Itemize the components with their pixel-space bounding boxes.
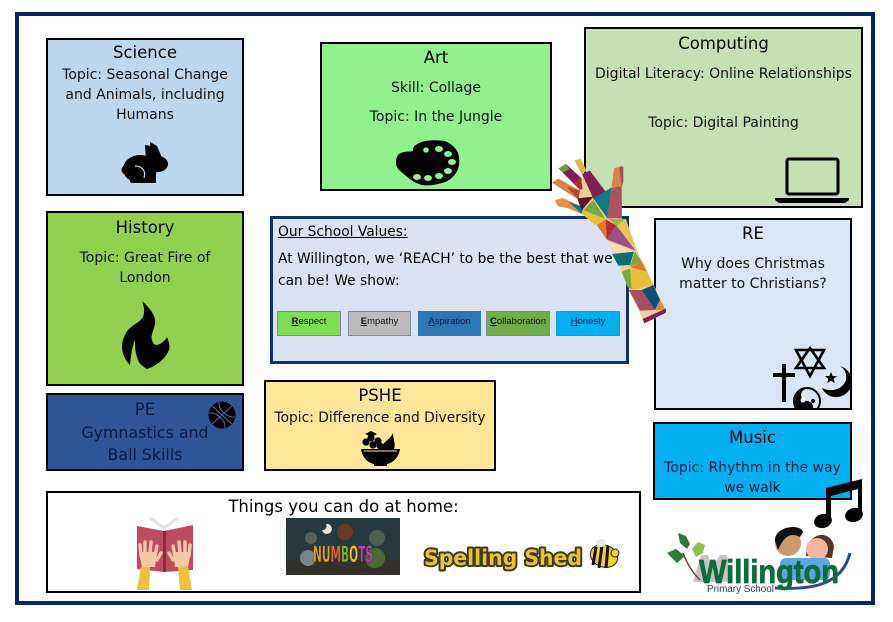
text: reach statement: At Willington, we ‘REACH’ to be the best that we	[278, 251, 613, 267]
text: PE topic: Gymnastics and	[81, 423, 209, 442]
icon: rabbit	[122, 142, 168, 183]
text: science topic: Topic: Seasonal Change	[62, 67, 228, 83]
logo: willington primary school	[667, 527, 850, 595]
heading: art: Art	[424, 48, 448, 67]
icon: religious symbols	[773, 348, 852, 414]
panel: PE	[46, 393, 244, 471]
icon: geometric raised hand	[552, 159, 666, 323]
text: science topic: and Animals, including	[65, 87, 225, 103]
panel: PSHE	[264, 380, 496, 471]
text: digital literacy: Digital Literacy: Online Relationships	[595, 66, 852, 82]
value: respect: Respect	[292, 316, 326, 327]
heading: PSHE: PSHE	[358, 386, 402, 405]
value: aspiration	[418, 311, 481, 336]
text: PE topic: Ball Skills	[108, 445, 182, 464]
heading: RE: RE	[742, 224, 764, 243]
image: spelling shed logo: Spelling Shed	[424, 546, 582, 570]
heading: PE: PE	[135, 400, 155, 419]
text: science topic: Humans	[116, 107, 174, 123]
icon: flame	[122, 301, 169, 369]
icon: book with hands	[137, 518, 193, 590]
text: music topic: we walk	[724, 480, 781, 496]
value: collaboration	[486, 311, 550, 336]
logo: willington primary school: Willington	[699, 553, 839, 590]
image: numbots	[286, 518, 400, 575]
panel: music	[653, 422, 852, 500]
icon: paint palette	[396, 140, 459, 185]
text: reach statement	[278, 251, 613, 289]
text: PSHE topic: Topic: Difference and Diversity	[275, 410, 485, 426]
value: aspiration: Aspiration	[428, 316, 471, 327]
panel: history	[46, 211, 244, 386]
image: spelling shed logo	[424, 539, 621, 571]
text: science topic	[62, 67, 228, 123]
value: respect	[277, 311, 341, 336]
icon: musical notes	[812, 479, 865, 530]
text: history topic: London	[119, 270, 171, 286]
text: reach statement: can be! We show:	[278, 273, 400, 289]
panel: RE	[654, 218, 852, 410]
text: art skill: Skill: Collage	[391, 80, 481, 96]
panel: computing	[584, 27, 863, 208]
text: computing topic: Topic: Digital Painting	[648, 115, 799, 131]
value: collaboration: Collaboration	[490, 316, 546, 327]
heading: things you can do at home: Things you can do at home:	[228, 497, 459, 516]
heading: our school values: Our School Values:	[278, 224, 408, 240]
icon: basketball	[208, 402, 236, 428]
text: PE topic	[81, 423, 209, 464]
text: history topic	[80, 250, 211, 286]
text: RE question: Why does Christmas	[681, 256, 825, 272]
heading: science: Science	[113, 43, 177, 62]
value: empathy	[348, 311, 411, 336]
logo: willington primary school: Primary School	[707, 584, 774, 595]
text: music topic: Topic: Rhythm in the way	[664, 460, 841, 476]
text: RE question: matter to Christians?	[679, 276, 827, 292]
panel: things to do at home	[46, 491, 641, 593]
heading: history: History	[116, 218, 174, 237]
icon: laptop	[775, 159, 849, 203]
value: empathy: Empathy	[361, 316, 398, 327]
panel: school values	[270, 216, 629, 364]
value: honesty: Honesty	[571, 316, 605, 327]
heading: music: Music	[729, 428, 776, 447]
panel: art	[320, 42, 552, 191]
icon: fruit bowl	[361, 431, 400, 466]
heading: computing: Computing	[678, 34, 769, 53]
text: RE question	[679, 256, 827, 292]
text: music topic	[664, 460, 841, 496]
value: honesty	[556, 311, 620, 336]
text: art topic: Topic: In the Jungle	[370, 109, 502, 125]
text: history topic: Topic: Great Fire of	[80, 250, 210, 266]
image: numbots: NUMBOTS	[313, 543, 373, 568]
panel: science	[46, 38, 244, 196]
